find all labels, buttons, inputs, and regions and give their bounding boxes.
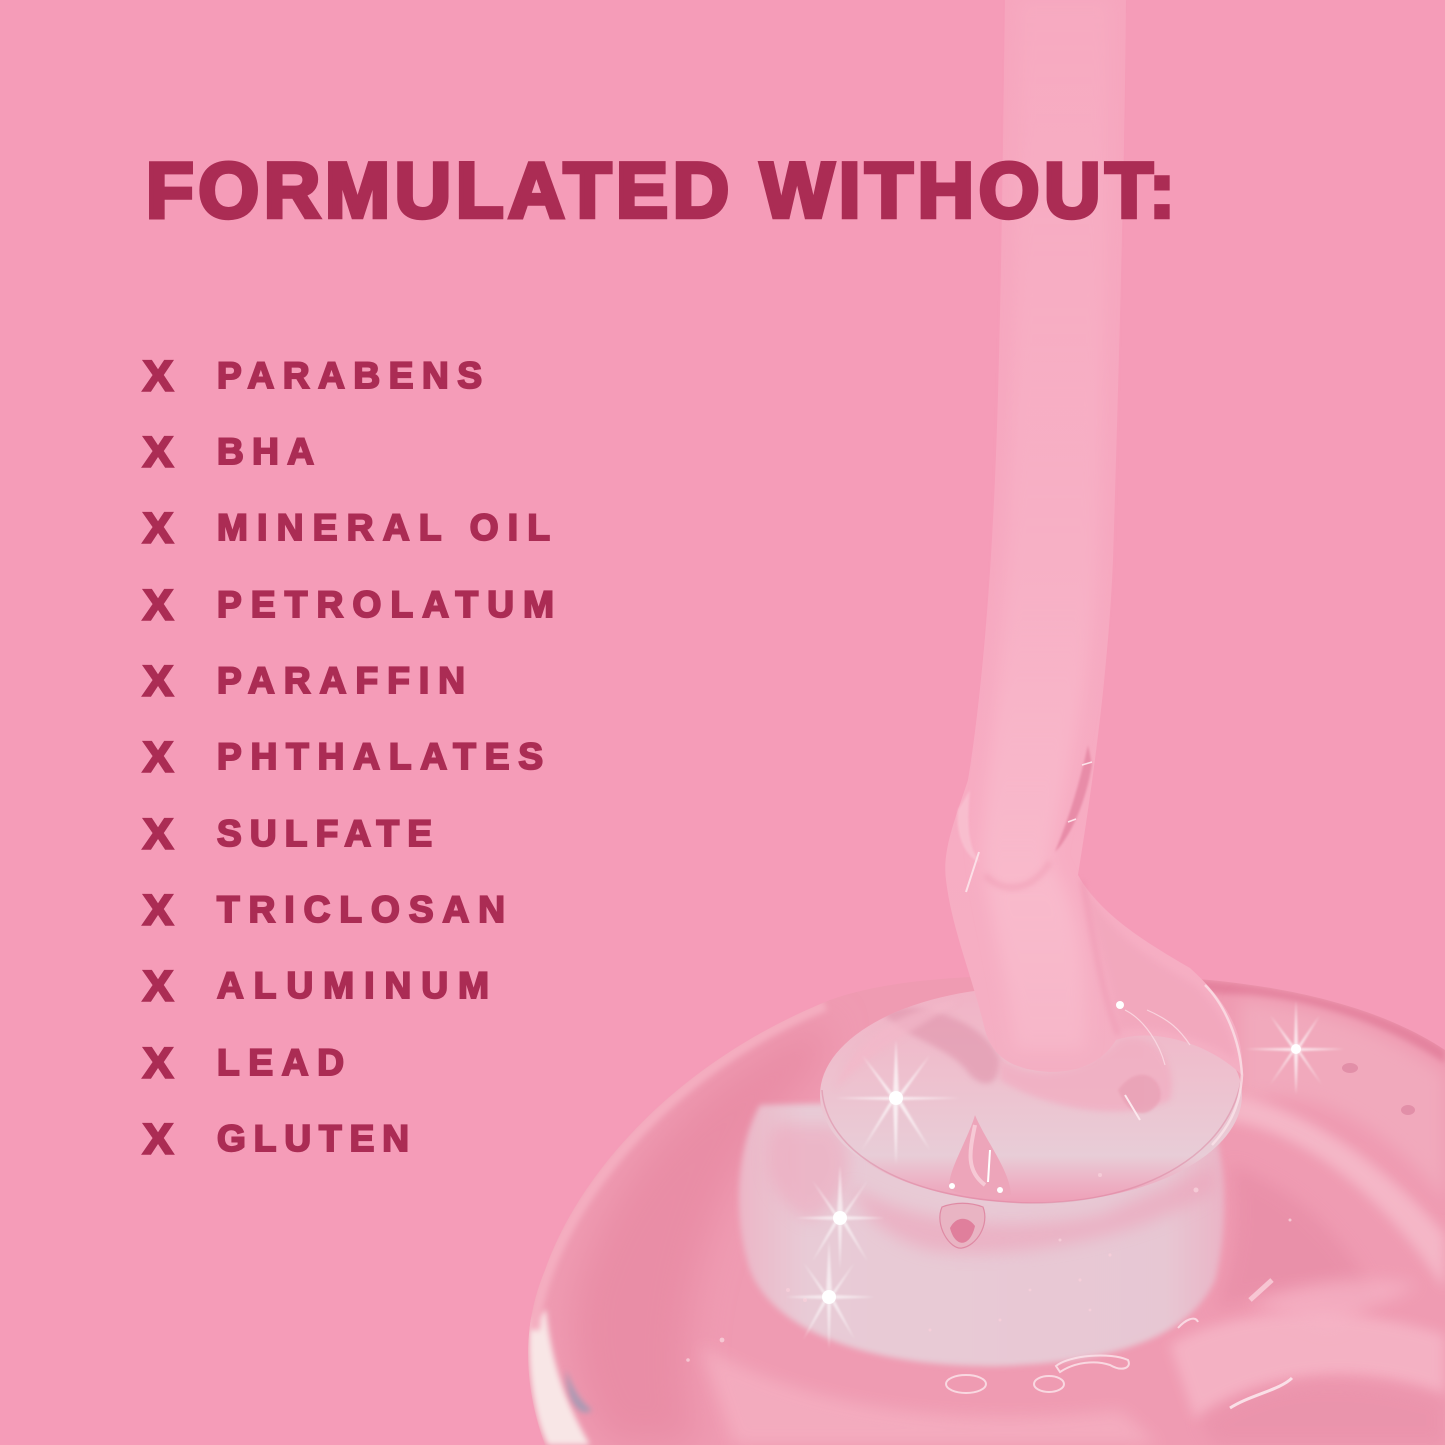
item: lead: X bbox=[143, 1040, 173, 1088]
item: paraffin bbox=[143, 658, 465, 706]
item: phthalates bbox=[143, 734, 543, 782]
item: mineral oil: X bbox=[143, 504, 173, 552]
item: gluten: X bbox=[143, 1116, 173, 1164]
item: parabens: PARABENS bbox=[217, 355, 482, 396]
item: sulfate: X bbox=[143, 810, 173, 858]
sparkle 1 bbox=[835, 1040, 960, 1165]
item: bha bbox=[143, 428, 314, 476]
ingredient list bbox=[143, 352, 554, 1164]
item: triclosan bbox=[143, 886, 505, 934]
item: phthalates: PHTHALATES bbox=[217, 736, 543, 777]
item: lead: LEAD bbox=[217, 1042, 344, 1083]
item: paraffin: X bbox=[143, 658, 173, 706]
item: bha: X bbox=[143, 428, 173, 476]
item: aluminum: X bbox=[143, 962, 173, 1010]
item: mineral oil: MINERAL OIL bbox=[217, 507, 550, 548]
pouring gel stream bbox=[945, 0, 1242, 1145]
item: aluminum bbox=[143, 962, 489, 1010]
gel puddle bbox=[500, 960, 1445, 1445]
sparkle 2 bbox=[795, 1165, 885, 1270]
item: phthalates: X bbox=[143, 734, 173, 782]
sparkle 3 bbox=[785, 1240, 875, 1350]
rim highlight bbox=[529, 1310, 590, 1445]
sparkle 4 bbox=[1245, 1000, 1345, 1095]
sparkles bbox=[785, 1000, 1345, 1350]
air bubbles bbox=[686, 1063, 1415, 1408]
drips bbox=[940, 1115, 1011, 1248]
gel stream photo bbox=[500, 0, 1445, 1445]
item: triclosan: X bbox=[143, 886, 173, 934]
item: parabens: X bbox=[143, 352, 173, 400]
item: petrolatum: X bbox=[143, 582, 173, 630]
upper gel dome bbox=[820, 987, 1242, 1203]
item: bha: BHA bbox=[217, 431, 314, 472]
title: FORMULATED WITHOUT: bbox=[146, 146, 1175, 234]
item: parabens bbox=[143, 352, 482, 400]
item: lead bbox=[143, 1040, 344, 1088]
item: paraffin: PARAFFIN bbox=[217, 660, 465, 701]
item: gluten bbox=[143, 1116, 409, 1164]
clear centre column bbox=[739, 1100, 1224, 1366]
item: sulfate bbox=[143, 810, 432, 858]
item: gluten: GLUTEN bbox=[217, 1118, 409, 1159]
item: sulfate: SULFATE bbox=[217, 813, 432, 854]
item: petrolatum: PETROLATUM bbox=[217, 584, 554, 625]
item: mineral oil bbox=[143, 504, 550, 552]
item: triclosan: TRICLOSAN bbox=[217, 889, 505, 930]
item: aluminum: ALUMINUM bbox=[217, 965, 489, 1006]
